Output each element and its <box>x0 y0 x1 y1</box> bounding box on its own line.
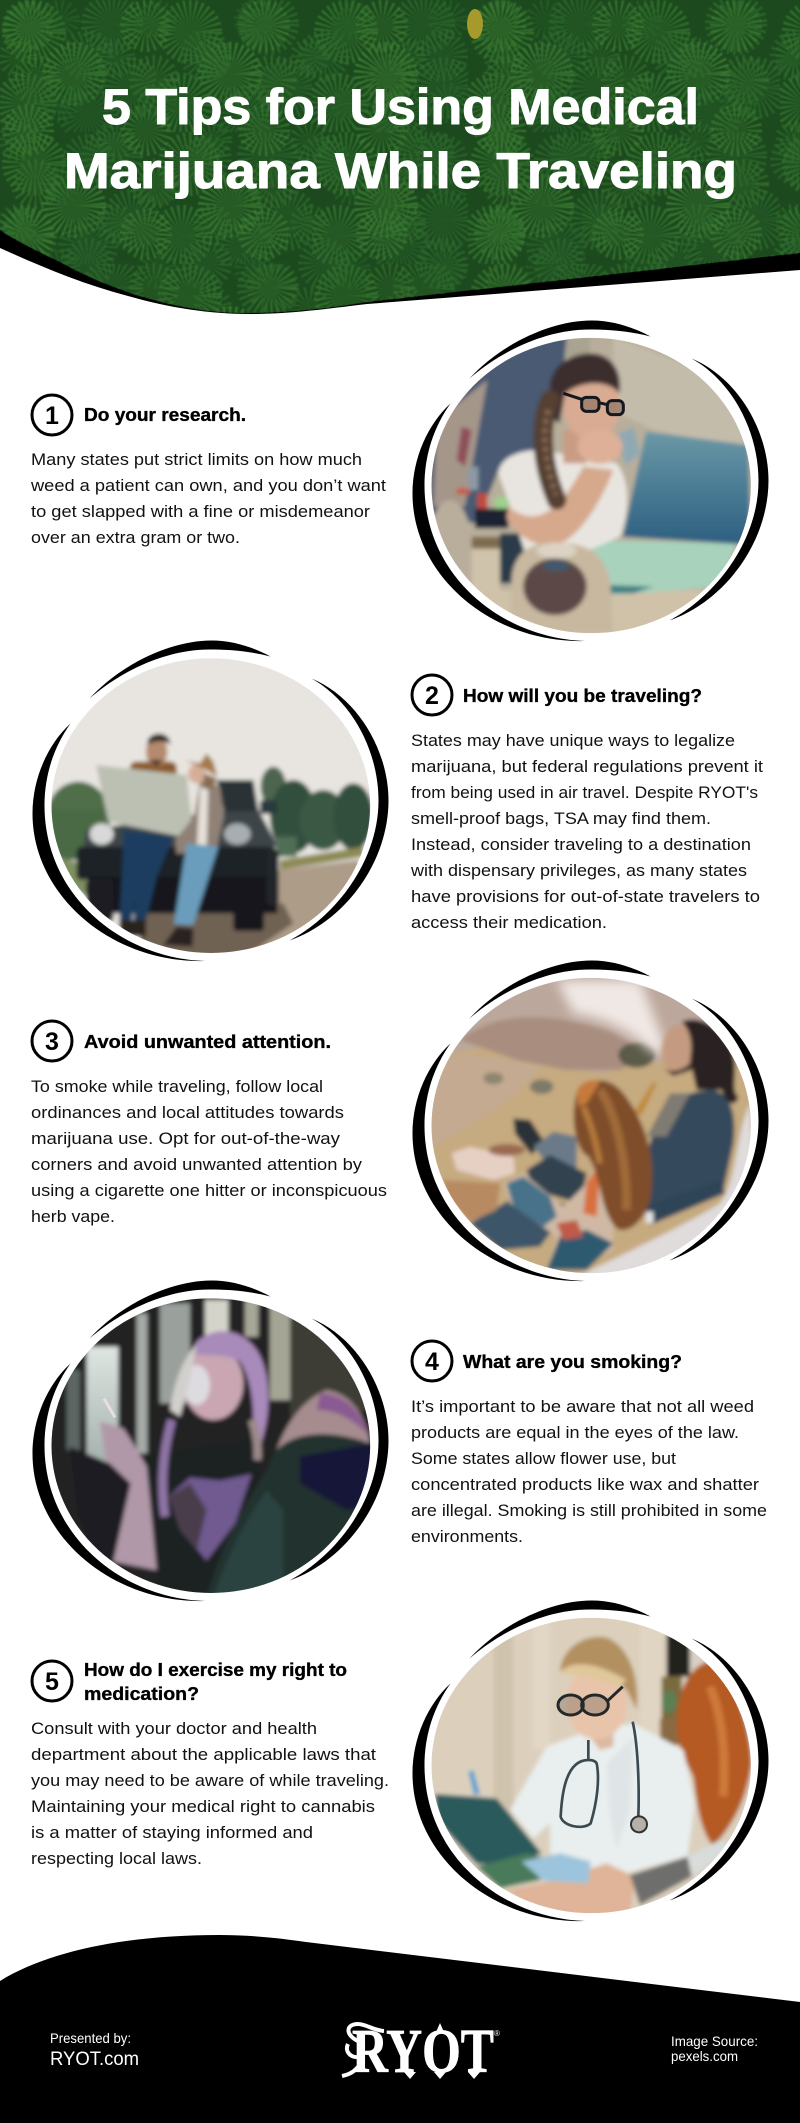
body text tip 5: Consult with your doctor and health <box>31 1719 317 1738</box>
image source credit <box>671 2033 758 2064</box>
number badge 3 <box>32 1021 72 1061</box>
body text tip 2: smell-proof bags, TSA may find them. <box>411 809 711 828</box>
swoosh ring tip 4 <box>32 1280 388 1601</box>
heading tip 5: medication? <box>84 1684 199 1704</box>
body text tip 3: using a cigarette one hitter or inconspicuous <box>31 1181 387 1200</box>
body text tip 3 <box>31 1077 387 1226</box>
footer <box>0 1935 800 2123</box>
header black swoosh <box>0 226 800 314</box>
body text tip 2 <box>410 731 763 932</box>
body text tip 3: corners and avoid unwanted attention by <box>31 1155 363 1174</box>
body text tip 2: marijuana, but federal regulations prevent it <box>411 757 763 776</box>
body text tip 3: marijuana use. Opt for out-of-the-way <box>31 1129 341 1148</box>
body text tip 5 <box>31 1719 389 1868</box>
body text tip 1: to get slapped with a fine or misdemeanor <box>31 502 370 521</box>
panel: tip 5 <box>31 1600 768 1921</box>
RYOT logo: ® <box>494 2029 500 2038</box>
body text tip 3: ordinances and local attitudes towards <box>31 1103 344 1122</box>
body text tip 5: is a matter of staying informed and <box>31 1823 313 1842</box>
body text tip 1 <box>30 450 386 547</box>
body text tip 3: herb vape. <box>31 1207 115 1226</box>
body text tip 3: To smoke while traveling, follow local <box>31 1077 323 1096</box>
number badge 1 <box>32 395 72 435</box>
body text tip 5: department about the applicable laws that <box>31 1745 376 1764</box>
title <box>64 79 737 199</box>
number badge 5 <box>32 1661 72 1701</box>
heading tip 4: What are you smoking? <box>463 1352 682 1372</box>
photo: woman smoking with purple light <box>47 1293 380 1600</box>
photo: woman at laptop <box>427 333 760 637</box>
number badge 2 <box>412 675 452 715</box>
body text tip 4: Some states allow flower use, but <box>411 1449 676 1468</box>
heading tip 5 <box>84 1660 347 1704</box>
body text tip 4: environments. <box>411 1527 523 1546</box>
heading tip 1: Do your research. <box>84 405 246 425</box>
heading tip 5: How do I exercise my right to <box>84 1660 347 1680</box>
header foliage photo <box>0 0 800 313</box>
number badge 4 <box>412 1341 452 1381</box>
swoosh ring tip 1 <box>412 320 768 641</box>
photo: couple with map and truck <box>47 653 380 960</box>
body text tip 5: Maintaining your medical right to cannabis <box>31 1797 375 1816</box>
heading tip 3: Avoid unwanted attention. <box>84 1032 331 1052</box>
panel: tip 1 <box>30 320 769 641</box>
presented by credit: RYOT.com <box>50 2049 139 2070</box>
body text tip 1: over an extra gram or two. <box>31 528 240 547</box>
swoosh ring tip 3 <box>412 960 768 1281</box>
body text tip 2: Instead, consider traveling to a destination <box>411 835 751 854</box>
presented by credit: Presented by: <box>50 2030 131 2046</box>
body text tip 2: have provisions for out-of-state travelers to <box>411 887 760 906</box>
body text tip 5: you may need to be aware of while traveling. <box>31 1771 389 1790</box>
number badge 4: 4 <box>425 1348 439 1376</box>
footer black shape <box>0 1935 800 2123</box>
panel: tip 2 <box>32 640 763 961</box>
number badge 2: 2 <box>425 682 439 710</box>
body text tip 1: weed a patient can own, and you don’t want <box>30 476 386 495</box>
number badge 1: 1 <box>45 402 59 430</box>
RYOT logo: RYOT <box>352 2018 494 2086</box>
panel: tip 3 <box>31 960 768 1281</box>
body text tip 1: Many states put strict limits on how much <box>31 450 362 469</box>
image source credit: pexels.com <box>671 2048 738 2064</box>
photo: doctor with clipboard <box>427 1613 760 1917</box>
body text tip 4: are illegal. Smoking is still prohibited in some <box>411 1501 767 1520</box>
presented by credit <box>50 2030 139 2070</box>
number badge 5: 5 <box>45 1668 59 1696</box>
header banner <box>0 0 800 314</box>
swoosh ring tip 2 <box>32 640 388 961</box>
body text tip 4: It’s important to be aware that not all weed <box>411 1397 754 1416</box>
body text tip 2: access their medication. <box>411 913 607 932</box>
body text tip 5: respecting local laws. <box>31 1849 202 1868</box>
body text tip 4: products are equal in the eyes of the law. <box>411 1423 739 1442</box>
body text tip 2: States may have unique ways to legalize <box>411 731 735 750</box>
body text tip 2: from being used in air travel. Despite RYOT's <box>411 783 758 802</box>
panel: tip 4 <box>32 1280 767 1601</box>
title: 5 Tips for Using Medical <box>102 79 699 135</box>
body text tip 4: concentrated products like wax and shatter <box>411 1475 759 1494</box>
title: Marijuana While Traveling <box>64 143 737 199</box>
image source credit: Image Source: <box>671 2033 758 2049</box>
body text tip 2: with dispensary privileges, as many states <box>410 861 747 880</box>
photo: couple smoking on hillside <box>427 973 760 1277</box>
body text tip 4 <box>411 1397 767 1546</box>
number badge 3: 3 <box>45 1028 59 1056</box>
heading tip 2: How will you be traveling? <box>463 686 702 706</box>
swoosh ring tip 5 <box>412 1600 768 1921</box>
